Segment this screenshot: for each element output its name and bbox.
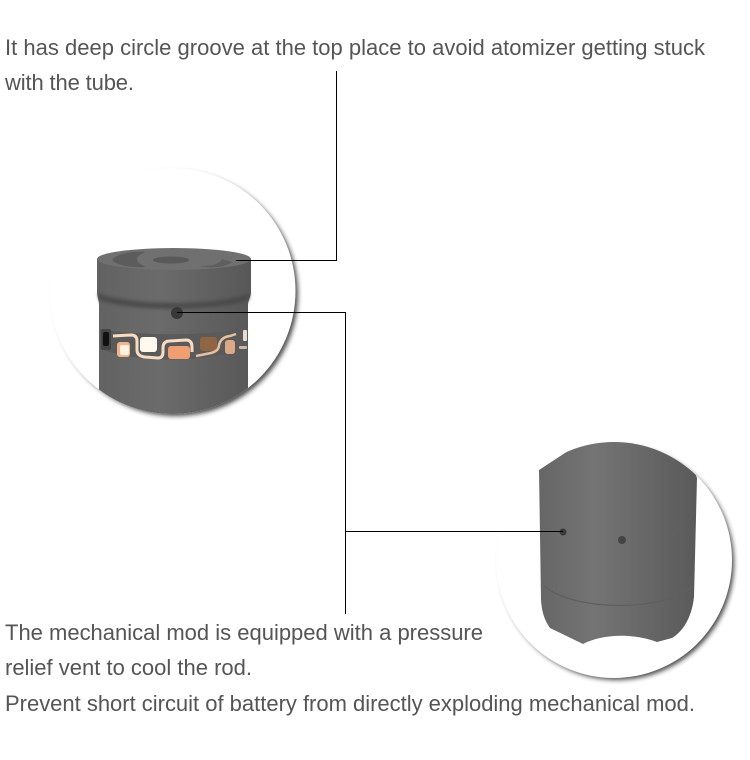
copper squares xyxy=(117,342,130,357)
leader line: vent on base xyxy=(345,530,563,532)
panel: top of mod magnified circle xyxy=(50,168,298,420)
waist shading xyxy=(98,293,250,309)
circle groove xyxy=(112,252,146,267)
circle shadow xyxy=(54,172,298,416)
circle background xyxy=(496,442,732,678)
groove right xyxy=(200,259,232,267)
mod top section illustration xyxy=(97,248,251,420)
top description text xyxy=(4,35,706,95)
body seam xyxy=(544,586,646,606)
bottom description text: Prevent short circuit of battery from directly exploding mechanical mod. xyxy=(5,691,695,716)
vent hole xyxy=(171,307,183,319)
black window xyxy=(101,329,111,350)
bottom description text: The mechanical mod is equipped with a pressure xyxy=(5,620,483,645)
leader line: vent to text xyxy=(177,312,346,614)
vent holes xyxy=(560,528,566,536)
top description text: It has deep circle groove at the top place to avoid atomizer getting stuck xyxy=(5,35,706,60)
panel: base of mod magnified circle xyxy=(496,430,734,680)
mod base illustration xyxy=(539,430,697,644)
mod body xyxy=(97,248,251,420)
circle background xyxy=(50,168,296,414)
bottom description text xyxy=(5,620,695,716)
cutout pattern band xyxy=(100,329,248,360)
mod body xyxy=(539,430,697,644)
top description text: with the tube. xyxy=(4,70,134,95)
leader line: top groove xyxy=(236,71,336,260)
thin ornamental strips xyxy=(113,335,192,358)
band backing xyxy=(100,330,202,360)
top face xyxy=(97,248,251,270)
bottom description text: relief vent to cool the rod. xyxy=(5,655,252,680)
centre hole xyxy=(153,256,189,264)
circle shadow xyxy=(500,446,734,680)
